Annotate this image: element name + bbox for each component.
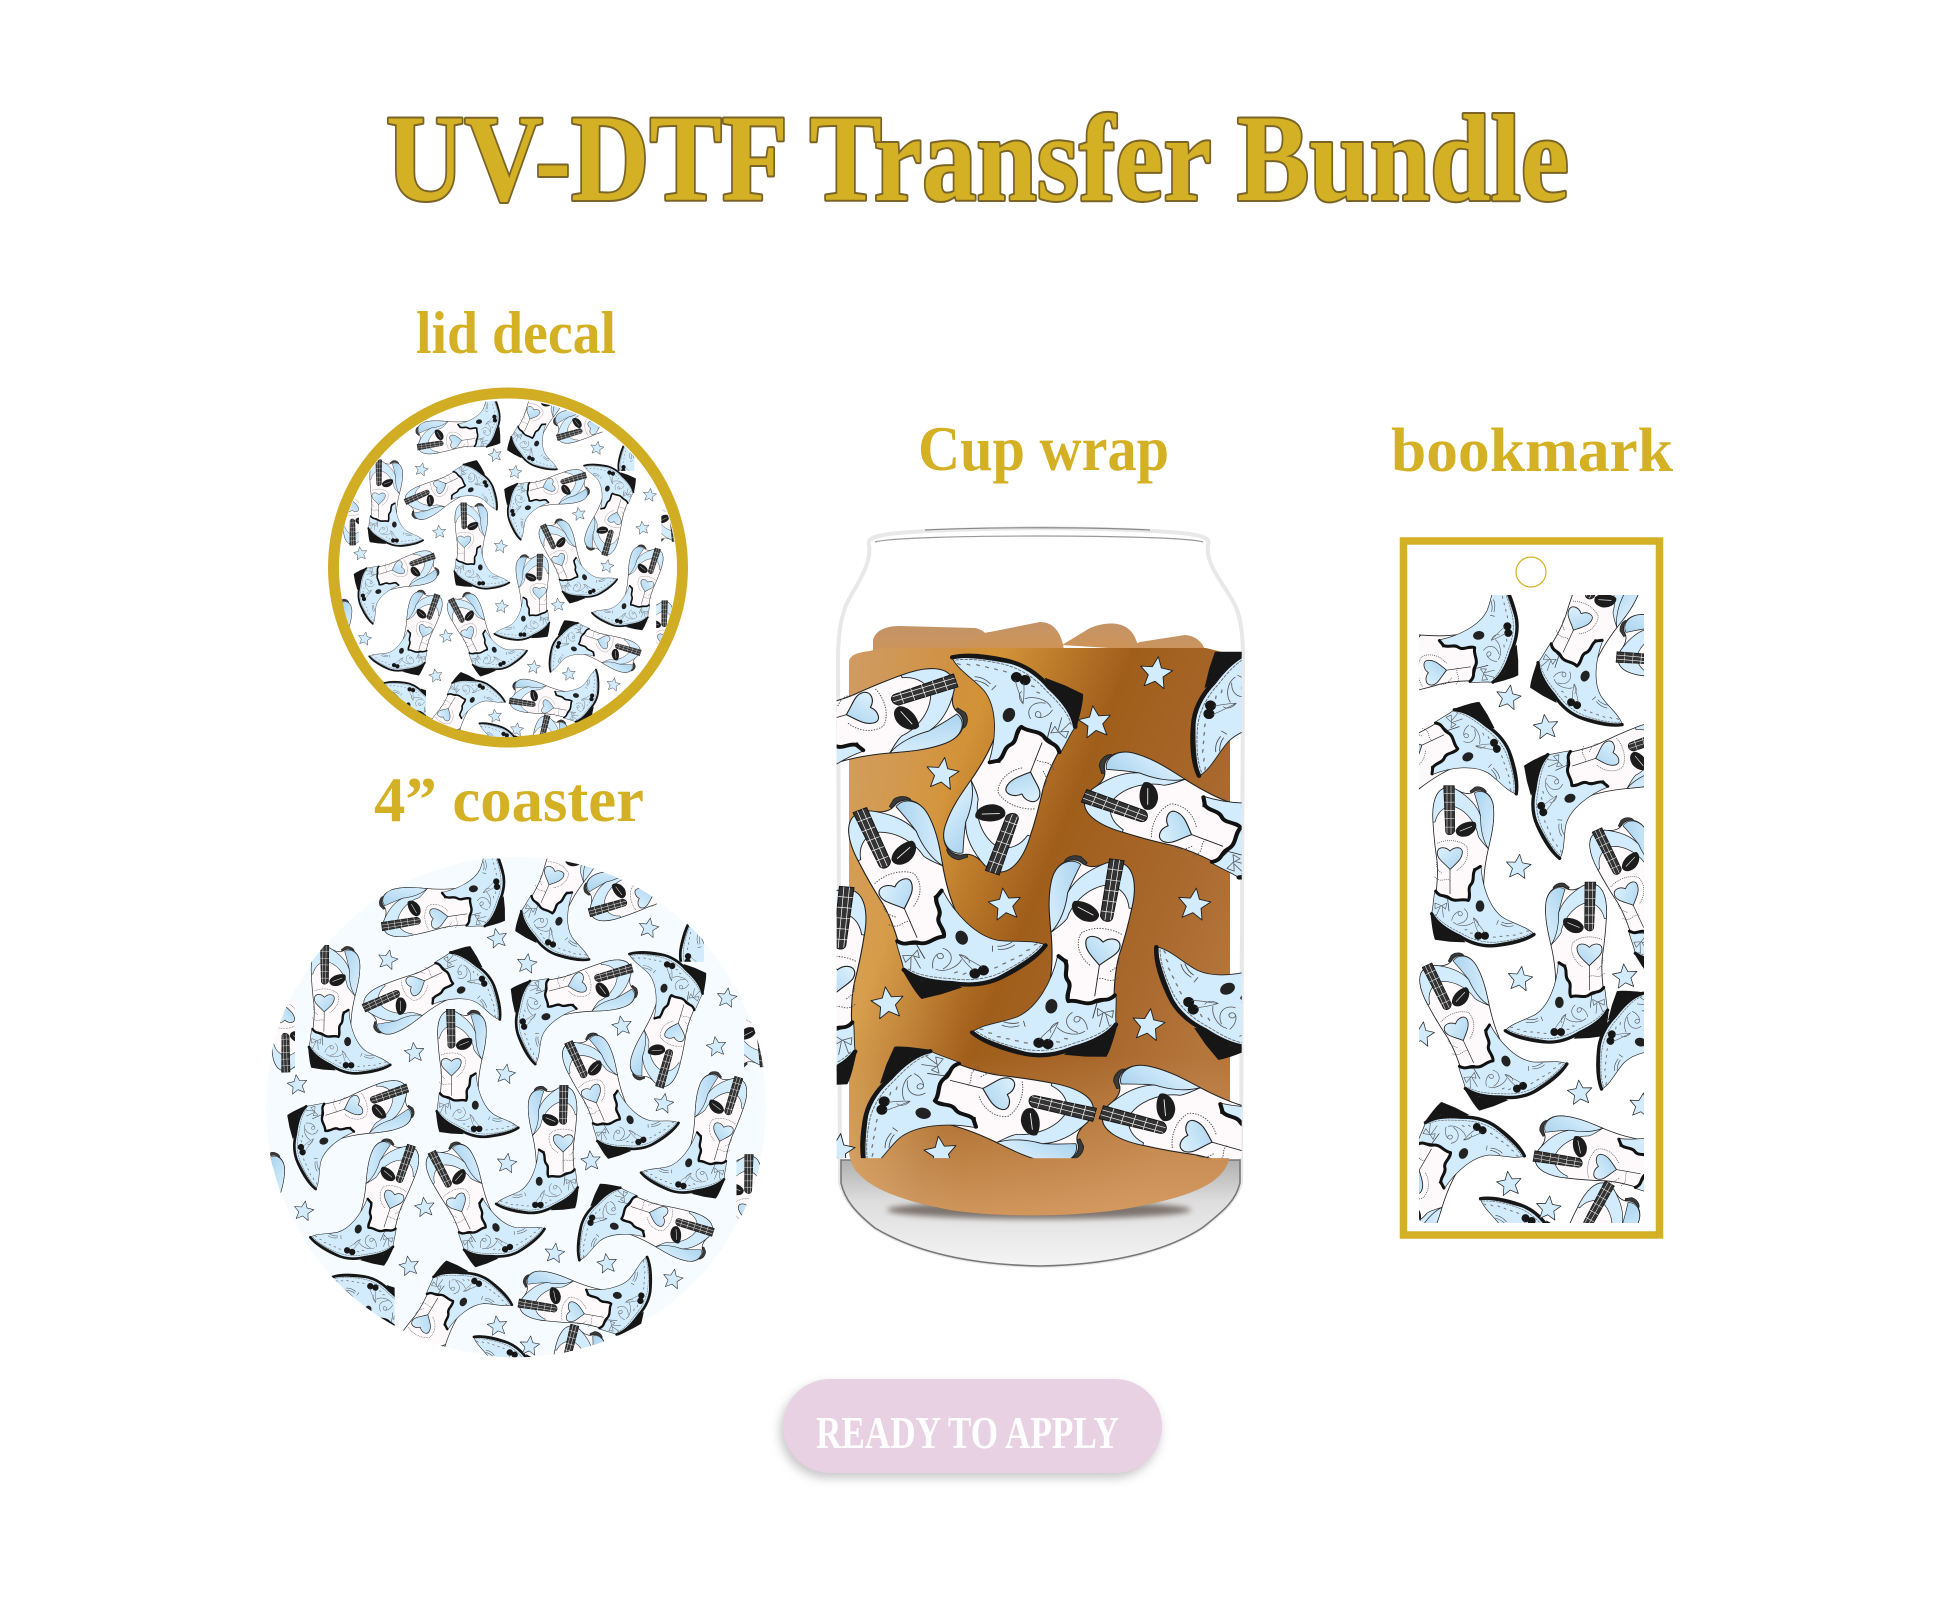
cup wrap boot pattern — [836, 652, 1242, 1158]
bookmark boot pattern — [1419, 595, 1644, 1223]
ice cubes — [873, 622, 1206, 660]
title: UV-DTF Transfer Bundle — [386, 90, 1569, 227]
ready to apply button — [780, 1379, 1162, 1478]
label: lid decal: lid decal — [416, 300, 616, 366]
label: cup wrap: Cup wrap — [918, 413, 1169, 484]
iced coffee liquid — [849, 648, 1230, 1215]
bookmark — [1400, 537, 1664, 1239]
bookmark hole — [1516, 557, 1546, 587]
ready to apply button: READY TO APPLY — [816, 1407, 1119, 1458]
glass cup with iced coffee — [836, 526, 1245, 1268]
label: 4 inch coaster: 4” coaster — [374, 764, 644, 835]
lid decal circle — [312, 371, 706, 819]
coaster boot pattern — [225, 814, 811, 1479]
label: bookmark: bookmark — [1391, 417, 1674, 485]
coaster circle — [225, 814, 811, 1479]
lid decal boot pattern — [312, 371, 706, 819]
